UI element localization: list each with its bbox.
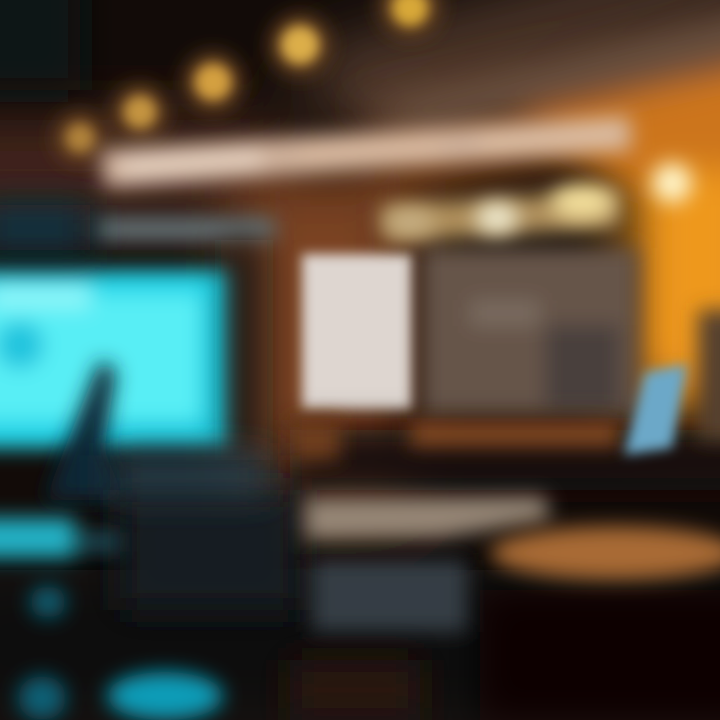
right wall figure xyxy=(698,310,720,440)
lower dark area xyxy=(120,430,720,720)
blue laptop xyxy=(624,364,688,455)
light band xyxy=(380,190,620,242)
side blue glow xyxy=(110,455,270,495)
warm floor glow xyxy=(290,660,420,720)
white panel xyxy=(302,254,412,410)
subtitle band xyxy=(95,218,275,240)
ceiling light halos xyxy=(55,0,440,163)
brick panel xyxy=(422,248,638,420)
heading band xyxy=(100,116,632,188)
wall lights xyxy=(384,163,692,235)
counter glow xyxy=(290,420,620,460)
ceiling lights xyxy=(66,0,428,152)
screen border and surround xyxy=(0,205,256,460)
light text blur xyxy=(305,496,550,540)
grey seating xyxy=(312,560,467,632)
silhouette xyxy=(45,360,125,500)
wooden table xyxy=(490,526,720,580)
cyan floor reflections xyxy=(0,518,223,720)
ceiling beam xyxy=(0,0,720,370)
cyan screen xyxy=(0,270,230,448)
